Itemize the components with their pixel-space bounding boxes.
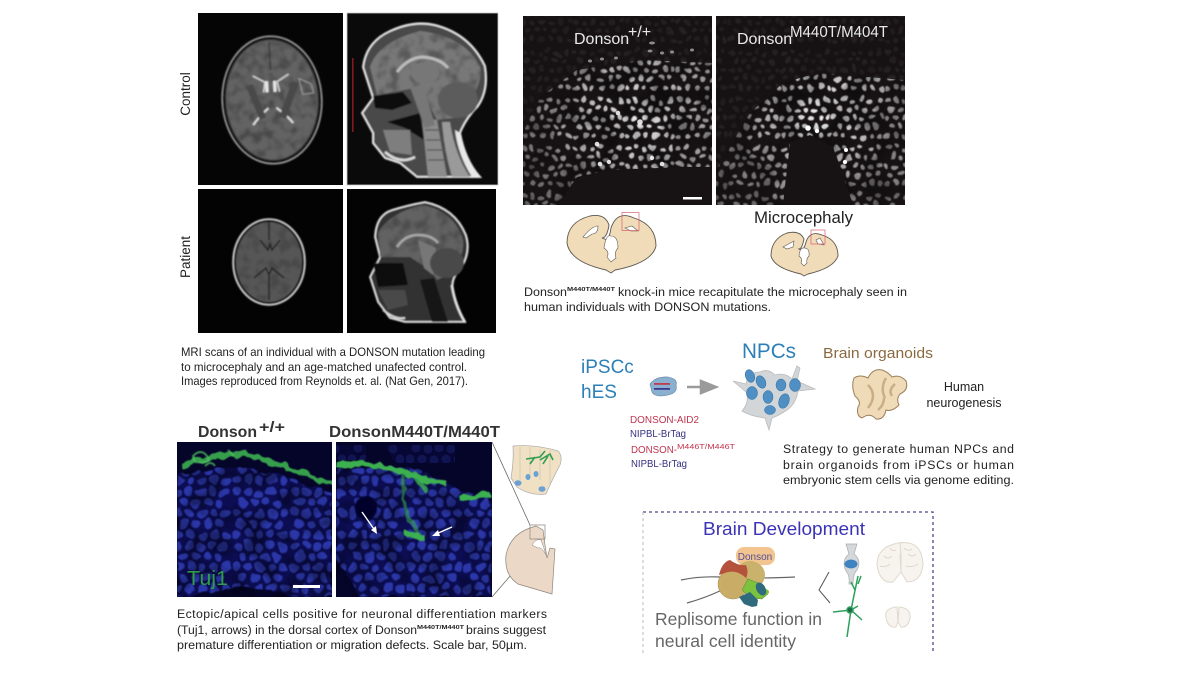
cell line labels: NIPBL-BrTag bbox=[630, 429, 686, 440]
arrows: fate choice bbox=[819, 572, 830, 603]
strain label: Donson +/+: Donson bbox=[574, 31, 629, 48]
caption: MRI scans: MRI scans of an individual with a DONSON mutation leading bbox=[181, 345, 485, 359]
caption: Tuj1 cells: Ectopic/apical cells positive for neuronal differentiation markers bbox=[177, 607, 547, 621]
cell line labels: DONSON- bbox=[631, 445, 677, 456]
cell line labels: NIPBL-BrTag bbox=[631, 459, 687, 470]
label: Control: Control bbox=[178, 72, 193, 116]
panel: MRI scans control and patient bbox=[178, 13, 498, 333]
label: Replisome function: neural cell identity bbox=[655, 631, 796, 651]
label: iPSCc hES: iPSCc bbox=[581, 357, 634, 378]
scale bar bbox=[293, 585, 320, 588]
panel: mouse cortex microscopy wild type bbox=[523, 16, 712, 205]
panel: Tuj1 headings bbox=[198, 420, 501, 441]
MRI axial patient bbox=[198, 189, 343, 333]
caption: Tuj1 cells: M440T/M440T bbox=[417, 625, 465, 631]
caption: Tuj1 cells: (Tuj1, arrows) in the dorsal cortex of Donson bbox=[177, 623, 417, 637]
panel: Tuj1 headings: Donson bbox=[198, 424, 257, 441]
label: iPSCc hES: hES bbox=[581, 382, 617, 403]
panel: strategy diagram bbox=[581, 340, 1014, 487]
dashed frame bbox=[643, 512, 933, 654]
icon: stem cell bbox=[650, 377, 676, 396]
scale bar bbox=[683, 197, 702, 200]
cell line labels: DONSON-AID2 bbox=[630, 415, 699, 426]
MRI sagittal control bbox=[347, 13, 498, 185]
arrow head 2 bbox=[432, 530, 440, 536]
caption: MRI scans: Images reproduced from Reynolds et. al. (Nat Gen, 2017). bbox=[181, 374, 468, 388]
red scale line bbox=[352, 58, 354, 132]
caption: strategy: Strategy to generate human NPCs and bbox=[783, 442, 1014, 456]
caption: MRI scans: to microcephaly and an age-matched unafected control. bbox=[181, 360, 467, 374]
icon: large brain bbox=[877, 542, 923, 582]
icon: neural progenitor bbox=[844, 544, 859, 584]
label: Human neurogenesis: Human bbox=[944, 380, 984, 394]
MRI sagittal patient bbox=[347, 189, 496, 333]
heading: Brain Development bbox=[703, 518, 865, 539]
caption: knock-in mice: M440T/M440T bbox=[567, 287, 616, 293]
caption: strategy: brain organoids from iPSCs or human bbox=[783, 458, 1014, 472]
caption: Tuj1 cells: brains suggest bbox=[466, 623, 547, 637]
panel: Tuj1 micrograph mutant bbox=[336, 442, 492, 597]
panel: Tuj1 headings: +/+ bbox=[259, 420, 285, 436]
icon: small brain bbox=[886, 607, 910, 627]
label: Donson: Donson bbox=[738, 552, 772, 563]
label: NPCs: NPCs bbox=[742, 340, 796, 363]
brain schematic wild type bbox=[567, 212, 656, 273]
cell line labels: M446T/M446T bbox=[677, 442, 735, 451]
brain schematic microcephaly bbox=[771, 230, 838, 276]
caption: MRI scans bbox=[181, 345, 485, 388]
panel: Tuj1 micrograph wild type bbox=[177, 442, 332, 597]
icon: replisome with Donson bbox=[681, 547, 795, 607]
caption: knock-in mice: Donson bbox=[524, 285, 567, 299]
label: Replisome function: Replisome function in bbox=[655, 609, 822, 629]
label: Brain organoids: Brain organoids bbox=[823, 345, 933, 362]
arrow: ectopic cell bbox=[362, 512, 374, 529]
cortex schematic with zoom lines bbox=[492, 442, 561, 597]
label: Microcephaly: Microcephaly bbox=[754, 209, 854, 227]
strain label: Donson M440T/M404T: Donson bbox=[737, 31, 792, 48]
neural column schematic bbox=[511, 446, 561, 494]
caption: Tuj1 cells bbox=[177, 607, 547, 652]
label: Human neurogenesis: neurogenesis bbox=[926, 396, 1002, 410]
panel: Tuj1 headings: DonsonM440T/M440T bbox=[329, 424, 501, 441]
caption: strategy: embryonic stem cells via genome editing. bbox=[783, 473, 1014, 487]
label: Patient: Patient bbox=[178, 236, 193, 278]
arrow bbox=[687, 381, 716, 393]
icon: neuron bbox=[833, 576, 862, 637]
arrow: ectopic cell 2 bbox=[436, 527, 452, 534]
strain label: Donson M440T/M404T: M440T/M404T bbox=[790, 24, 888, 41]
icon: NPC cluster bbox=[733, 366, 815, 430]
panel: Brain Development bbox=[643, 512, 933, 654]
cell line labels bbox=[630, 415, 735, 470]
icon: organoid bbox=[853, 370, 907, 419]
strain label: Donson +/+: +/+ bbox=[628, 24, 651, 41]
caption: Tuj1 cells: premature differentiation or migration defects. Scale bar, 50µm. bbox=[177, 638, 527, 652]
caption: strategy bbox=[783, 442, 1014, 487]
caption: knock-in mice: human individuals with DONSON mutations. bbox=[524, 300, 771, 314]
label: Tuj1: Tuj1 bbox=[187, 568, 228, 590]
caption: knock-in mice: knock-in mice recapitulate the microcephaly seen in bbox=[618, 285, 907, 299]
arrow head bbox=[371, 526, 377, 534]
panel: mouse cortex microscopy mutant bbox=[716, 16, 905, 205]
MRI axial control bbox=[198, 13, 343, 185]
caption: knock-in mice bbox=[524, 285, 907, 314]
